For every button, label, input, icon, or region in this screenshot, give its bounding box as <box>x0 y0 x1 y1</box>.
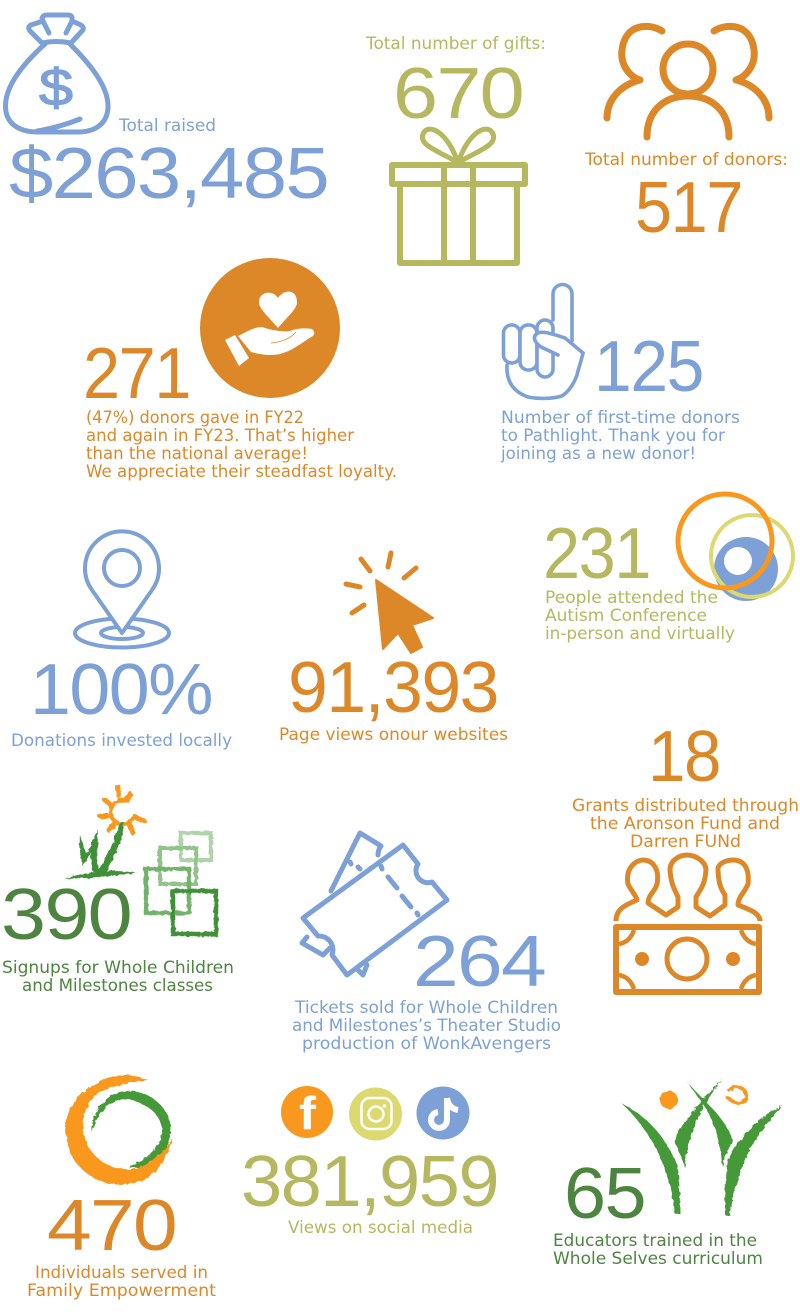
text: grants description: Darren FUNd <box>630 832 741 851</box>
text: signups description: Signups for Whole Children <box>2 958 234 977</box>
text: tickets description: and Milestones’s Theater Studio <box>292 1016 561 1035</box>
number: total raised: $263,485 <box>9 134 328 214</box>
icon: money bag <box>6 15 108 132</box>
number: invested locally: 100% <box>30 650 212 730</box>
text: first-time donors description: Number of first-time donors <box>501 408 740 427</box>
text: grants description <box>572 796 799 851</box>
icon: people and banknote <box>616 855 760 992</box>
text: signups description <box>2 958 234 995</box>
text: repeat donors description <box>86 408 397 481</box>
panel: educators trained <box>553 1079 783 1268</box>
text: conference description: People attended the <box>545 588 718 607</box>
panel: page views <box>279 553 508 744</box>
text: family empowerment description: Family Empowerment <box>27 1281 217 1300</box>
text: repeat donors description: and again in FY23. That’s higher <box>86 426 354 445</box>
icon: click cursor <box>346 553 433 653</box>
text: tickets description: production of WonkAvengers <box>302 1034 551 1053</box>
text: educators description: Educators trained in the <box>553 1231 757 1250</box>
icon: gift box <box>392 129 525 263</box>
text: repeat donors description: than the national average! <box>86 444 308 463</box>
text: educators description <box>553 1231 763 1268</box>
label: total donors: Total number of donors: <box>584 150 788 169</box>
text: conference description <box>545 588 735 643</box>
number: grants: 18 <box>648 717 720 797</box>
panel: total gifts <box>365 34 546 263</box>
text: first-time donors description: joining as a new donor! <box>500 444 696 463</box>
label: total raised: Total raised <box>118 116 216 135</box>
panel: grants distributed <box>572 717 799 992</box>
number: social views: 381,959 <box>241 1142 498 1222</box>
number: total gifts: 670 <box>393 54 523 134</box>
text: repeat donors description: We appreciate their steadfast loyalty. <box>86 462 397 481</box>
icon: raised finger hand <box>504 284 583 398</box>
number: conference attendees: 231 <box>543 514 650 594</box>
icon: overlapping squares <box>146 833 216 934</box>
text: grants description: Grants distributed through <box>572 796 799 815</box>
panel: total donors <box>584 26 788 248</box>
panel: total raised <box>6 15 328 214</box>
icon: grass figures <box>621 1079 783 1215</box>
text: signups description: and Milestones classes <box>22 976 213 995</box>
icon: overlapping circles <box>678 494 793 601</box>
icon: tickets <box>302 833 447 975</box>
panel: class signups <box>1 787 234 995</box>
number: tickets sold: 264 <box>413 922 545 1002</box>
text: tickets description: Tickets sold for Whole Children <box>294 998 558 1017</box>
icon: tiktok <box>416 1086 470 1140</box>
text: conference description: in-person and virtually <box>545 624 735 643</box>
text: repeat donors description: (47%) donors gave in FY22 <box>86 408 304 427</box>
number: repeat donors: 271 <box>83 334 190 414</box>
icon: flower and sun <box>65 787 144 879</box>
panel: donations invested locally <box>11 531 232 750</box>
icon: facebook: f <box>299 1087 317 1139</box>
panel: tickets sold <box>292 833 561 1053</box>
icon: facebook <box>281 1086 333 1139</box>
label: page views: Page views onour websites <box>279 725 508 744</box>
text: first-time donors description <box>500 408 740 463</box>
icon: map pin <box>75 531 169 648</box>
panel: first-time donors <box>500 284 740 463</box>
text: grants description: the Aronson Fund and <box>590 814 780 833</box>
number: page views: 91,393 <box>288 648 498 728</box>
number: signups: 390 <box>1 875 131 955</box>
text: first-time donors description: to Pathlight. Thank you for <box>501 426 725 445</box>
number: total donors: 517 <box>635 168 742 248</box>
number: individuals served: 470 <box>47 1186 176 1266</box>
text: family empowerment description: Individuals served in <box>35 1263 208 1282</box>
number: first-time donors: 125 <box>594 327 703 407</box>
text: educators description: Whole Selves curriculum <box>553 1249 763 1268</box>
icon: painted ring <box>66 1075 172 1185</box>
text: tickets description <box>292 998 561 1053</box>
number: educators trained: 65 <box>564 1154 645 1234</box>
panel: repeat donors <box>83 258 397 481</box>
panel: family empowerment <box>27 1075 217 1300</box>
icon: donors group <box>607 26 769 137</box>
icon: instagram <box>349 1088 402 1140</box>
label: total gifts: Total number of gifts: <box>365 34 546 53</box>
text: family empowerment description <box>27 1263 217 1300</box>
text: conference description: Autism Conference <box>545 606 707 625</box>
icon: money bag: $ <box>39 59 73 117</box>
panel: autism conference <box>543 494 793 643</box>
panel: social media <box>241 1086 498 1237</box>
icon: heart in hand <box>200 258 340 398</box>
label: social views: Views on social media <box>288 1218 473 1237</box>
label: invested locally: Donations invested locally <box>11 731 232 750</box>
